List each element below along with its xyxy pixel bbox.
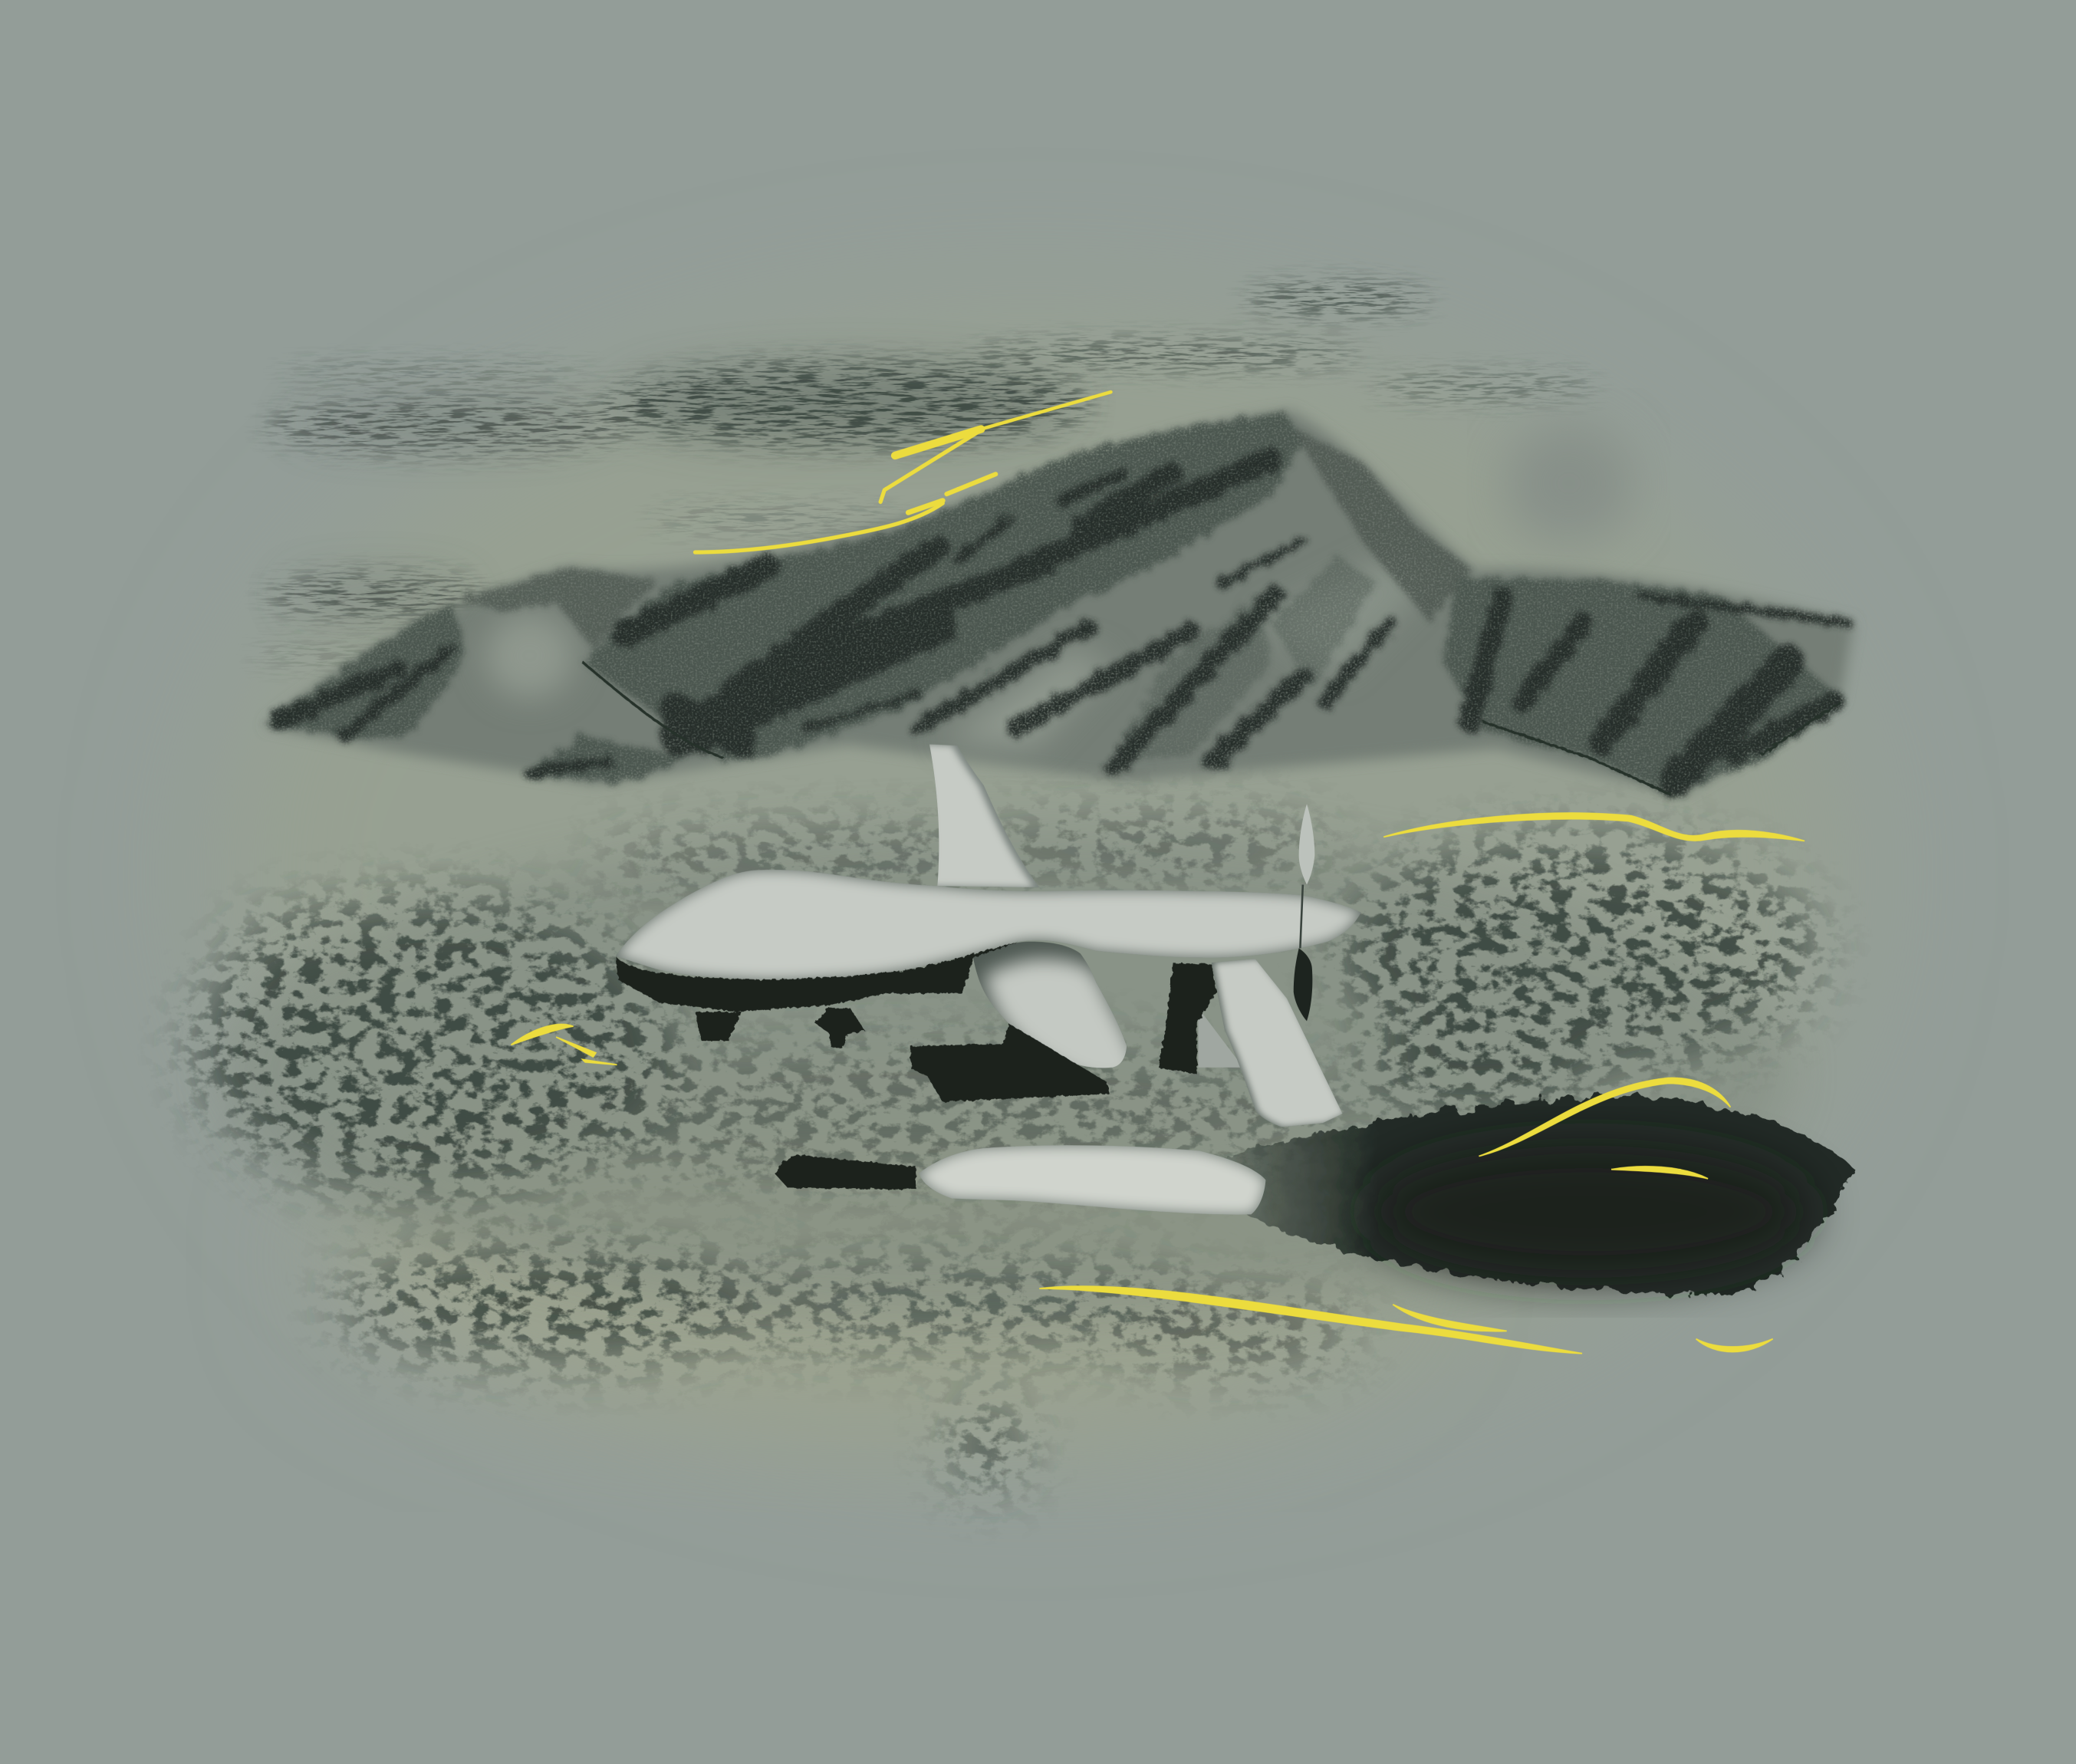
illustration: drone firing a missile in front of mountains: [168, 271, 1858, 1512]
missile nose: [775, 1155, 916, 1190]
hazy cloud behind peak: [1505, 424, 1633, 543]
near wing: [1198, 947, 1357, 1139]
yellow strokes lower: [511, 813, 1805, 1354]
missile body: [919, 1145, 1265, 1215]
sky shading: [285, 370, 1072, 612]
mountain body: [265, 410, 1854, 795]
hanging munitions: [911, 1024, 1110, 1102]
light panel between strut and wing: [1198, 1008, 1243, 1068]
mountain base lines: [583, 662, 1841, 795]
propeller: [1294, 804, 1314, 1021]
fuselage underside: [616, 942, 1019, 1012]
drone: [603, 735, 1370, 1139]
landing strut: [1159, 963, 1217, 1074]
sky charcoal streaks: [252, 285, 1595, 662]
light valleys: [485, 556, 1430, 749]
mountains: [262, 410, 1854, 795]
mid-tone charcoal mass: [262, 410, 1843, 795]
ridge shadow slashes: [278, 459, 1847, 782]
ground shading: [225, 828, 1788, 1318]
tail fin: [920, 735, 1052, 894]
yellow strokes upper: [695, 392, 1110, 552]
far wing: [966, 933, 1139, 1085]
sensor pods: [695, 1008, 864, 1048]
missile: [775, 1145, 1265, 1215]
fuselage: [603, 861, 1370, 986]
background glow: [212, 304, 1854, 1443]
smoke plume: [1198, 1097, 1854, 1295]
ground texture: [199, 824, 1814, 1486]
